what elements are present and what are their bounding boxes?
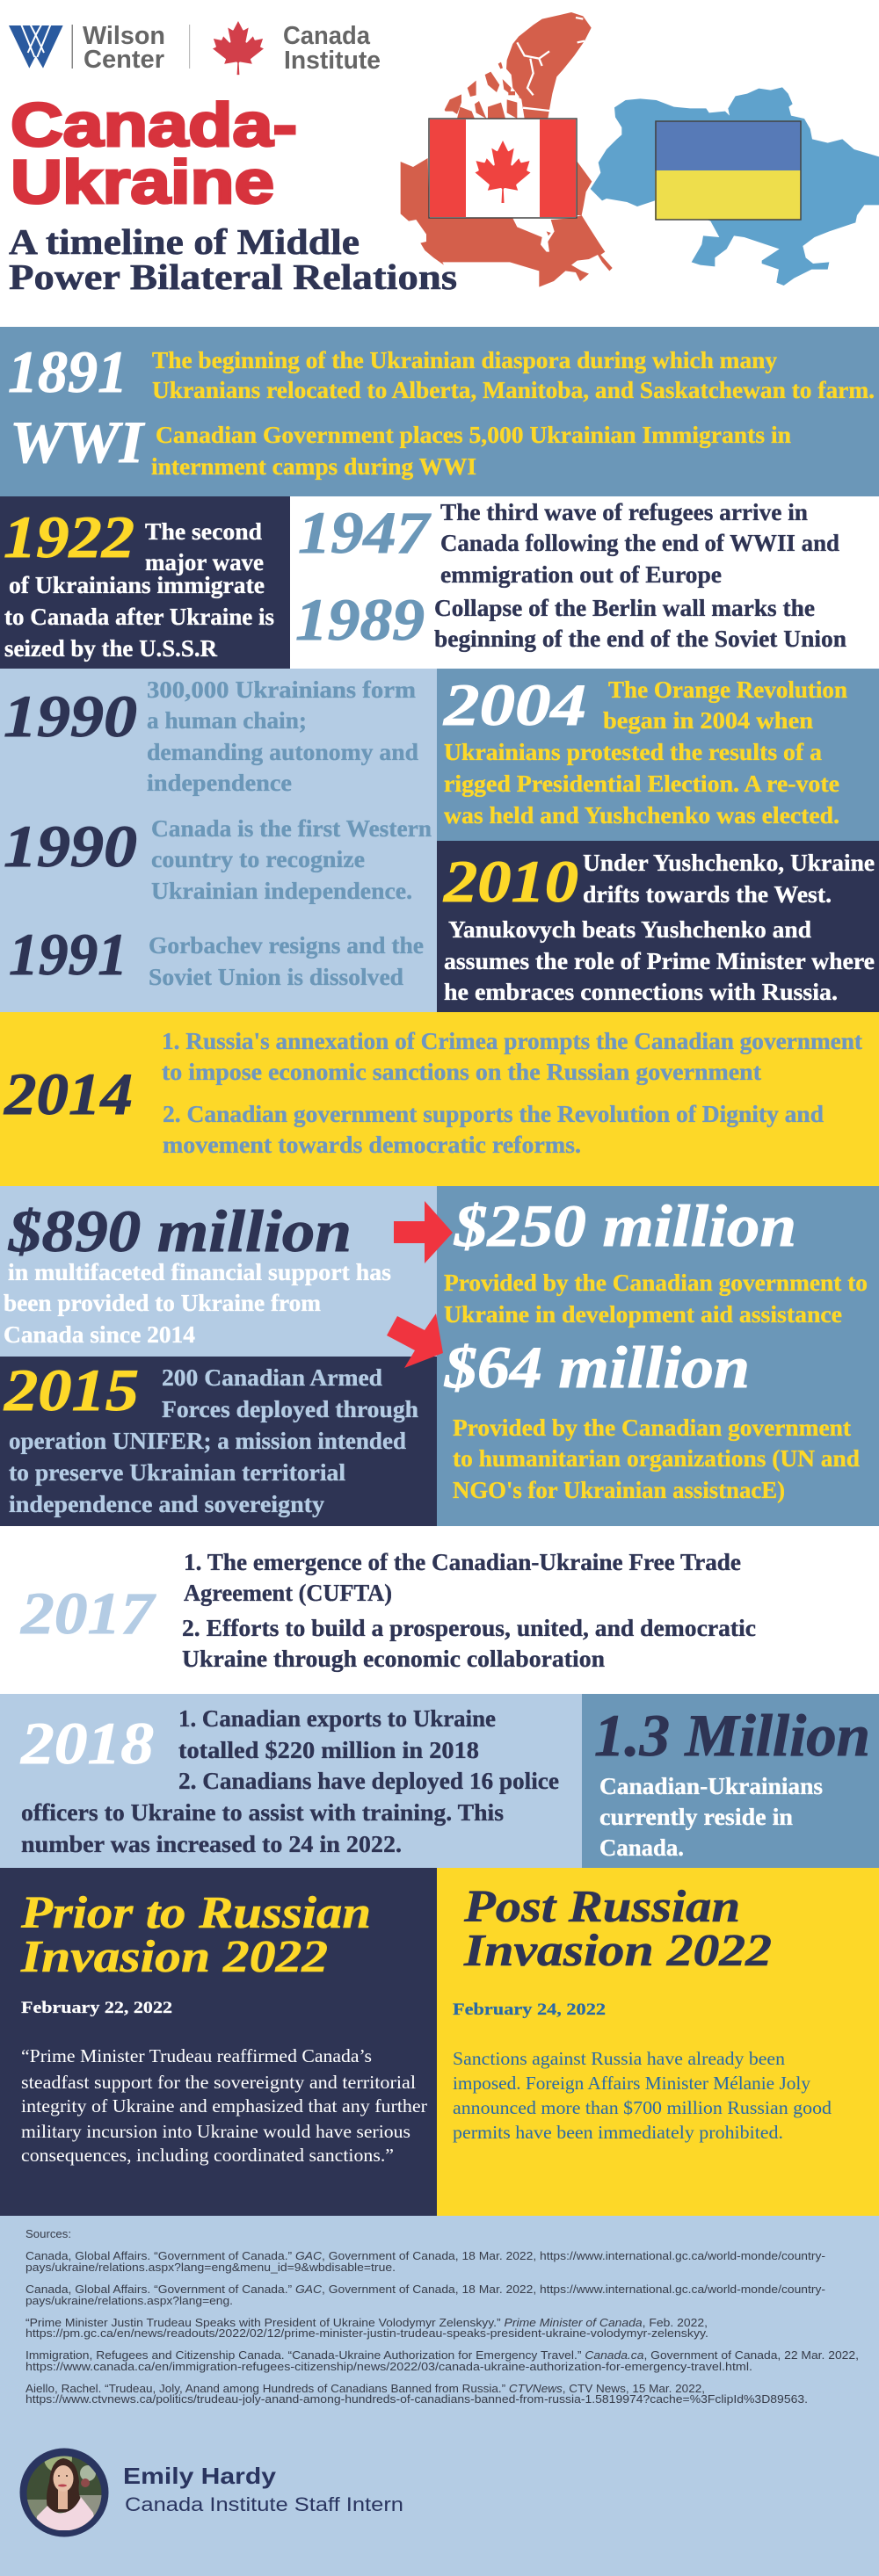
logo: Wilson Center <box>9 22 165 74</box>
sources: pays/ukraine/relations.aspx?lang=eng. <box>25 2294 233 2307</box>
text: Yushchenko and Yanukovych: he embraces connections with Russia. <box>444 979 838 1005</box>
heading: prior <box>20 1888 371 1982</box>
year: 2004: 2004 <box>443 671 586 738</box>
map: Canada <box>401 12 613 287</box>
text: development aid: Ukraine in development aid assistance <box>444 1301 842 1328</box>
quote: consequences, including coordinated sanctions.” <box>21 2145 394 2166</box>
text: financial support: been provided to Ukraine from <box>4 1290 322 1316</box>
text: Yushchenko and Yanukovych: drifts towards the West. <box>583 881 832 908</box>
text: financial support: Canada since 2014 <box>4 1321 195 1348</box>
text: exports and police: 1. Canadian exports to Ukraine <box>178 1705 496 1732</box>
year: 2017: 2017 <box>20 1580 156 1646</box>
text: internment: internment camps during WWI <box>151 453 476 480</box>
text: second wave <box>4 518 274 662</box>
text: Yushchenko and Yanukovych <box>444 850 875 1005</box>
text: Canadian-Ukrainians: Canadian-Ukrainians <box>599 1773 823 1799</box>
sources: https://www.ctvnews.ca/politics/trudeau-joly-anand-among-hundreds-of-canadians-banned-from-russia-1.5819974?cache=%3FclipId%3D89563. <box>25 2392 808 2406</box>
year: 1891: 1891 <box>8 338 127 405</box>
quote <box>21 2045 427 2166</box>
author name: Canada Institute Staff Intern <box>125 2493 403 2515</box>
header <box>9 12 879 297</box>
text: Berlin wall <box>434 595 846 652</box>
text: operation UNIFER <box>9 1364 418 1517</box>
text: development aid <box>444 1270 868 1328</box>
flag: Ukraine <box>655 121 801 220</box>
text: third wave: Canada following the end of WWII and <box>440 530 839 556</box>
stat: $64 million: $64 million <box>444 1334 750 1400</box>
panel: post invasion <box>437 1868 879 2216</box>
text: financial support <box>4 1259 391 1348</box>
year: 2010: 2010 <box>443 848 578 915</box>
panel: sources and author <box>0 2216 879 2576</box>
logo: Canada Institute: Institute <box>284 47 381 75</box>
text: Orange Revolution: Ukrainians protested the results of a <box>444 739 823 765</box>
sources: Canada, Global Affairs. “Government of Canada.” GAC, Government of Canada, 18 Mar. 2022, https://www.international.gc.ca/world-monde/country- <box>25 2283 825 2296</box>
text: humanitarian aid: to humanitarian organizations (UN and <box>453 1445 860 1472</box>
text: sanctions <box>453 2048 832 2143</box>
logo: Canada Institute: Canada <box>283 22 371 50</box>
panel: 2010 <box>437 841 879 1012</box>
sources: Immigration, Refugees and Citizenship Canada. “Canada-Ukraine Authorization for Emergency Travel.” Canada.ca , Government of Canada, 22 Mar. 2022, <box>25 2348 859 2362</box>
text: third wave: emmigration out of Europe <box>440 561 722 588</box>
text: Gorbachev: Gorbachev resigns and the <box>149 932 424 959</box>
text: humanitarian aid: NGO's for Ukrainian assistnacE) <box>453 1477 785 1503</box>
panel: 2014 <box>0 1012 879 1186</box>
subtitle: A timeline of Middle <box>9 221 360 262</box>
text: CUFTA: Agreement (CUFTA) <box>184 1580 392 1606</box>
text: operation UNIFER: to preserve Ukrainian territorial <box>9 1459 346 1486</box>
date: February 22: February 22, 2022 <box>21 1999 172 2017</box>
quote: integrity of Ukraine and emphasized that any further <box>21 2095 427 2117</box>
text: recognition: Canada is the first Western <box>151 815 432 842</box>
portrait: Emily Hardy <box>19 2444 109 2537</box>
heading: post <box>463 1882 772 1976</box>
panel: 2015 <box>0 1357 437 1526</box>
text: second wave: The second <box>145 518 262 545</box>
text: internment: Canadian Government places 5,000 Ukrainian Immigrants in <box>156 422 791 448</box>
logo: Wilson Center: Center <box>84 46 164 74</box>
year: 1947: 1947 <box>298 499 432 566</box>
text: Berlin wall: beginning of the end of the Soviet Union <box>434 626 846 652</box>
sources <box>25 2227 859 2406</box>
text: operation UNIFER: Forces deployed through <box>162 1396 418 1422</box>
sources: https://pm.gc.ca/en/news/readouts/2022/02/12/prime-minister-justin-trudeau-speaks-president-ukraine-volodymyr-zelenskyy. <box>25 2326 708 2340</box>
logo: Wilson Center: Wilson <box>83 22 165 50</box>
year: 2018: 2018 <box>20 1710 154 1776</box>
text: operation UNIFER: 200 Canadian Armed <box>162 1364 382 1391</box>
text: diaspora: Ukranians relocated to Alberta, Manitoba, and Saskatchewan to farm. <box>152 377 875 403</box>
date: February 24: February 24, 2022 <box>453 2001 606 2019</box>
text: Canadian-Ukrainians <box>599 1773 823 1861</box>
text: recognition: Ukrainian independence. <box>151 878 412 904</box>
text: Yushchenko and Yanukovych: assumes the role of Prime Minister where <box>444 948 875 974</box>
panel: prior to invasion <box>0 1868 437 2216</box>
panel: $890 million <box>0 1186 437 1357</box>
text: Orange Revolution: rigged Presidential Election. A re-vote <box>444 771 839 797</box>
sources: pays/ukraine/relations.aspx?lang=eng&menu_id=9&wbdisable=true. <box>25 2261 396 2274</box>
flag: Canada <box>429 119 577 218</box>
text: sanctions and reforms: 1. Russia's annexation of Crimea prompts the Canadian government <box>162 1028 862 1054</box>
text: exports and police: 2. Canadians have deployed 16 police <box>178 1768 559 1794</box>
year: 1922: 1922 <box>4 503 134 570</box>
text: recognition <box>151 815 432 904</box>
text: sanctions and reforms: movement towards democratic reforms. <box>163 1132 581 1158</box>
text: exports and police: totalled $220 million in 2018 <box>178 1737 479 1763</box>
subtitle: Power Bilateral Relations <box>9 257 457 297</box>
text: human chain: a human chain; <box>147 707 307 734</box>
text: Yushchenko and Yanukovych: Under Yushchenko, Ukraine <box>583 850 875 876</box>
sources: Canada, Global Affairs. “Government of Canada.” GAC, Government of Canada, 18 Mar. 2022, https://www.international.gc.ca/world-monde/country- <box>25 2249 825 2262</box>
text: Yushchenko and Yanukovych: Yanukovych beats Yushchenko and <box>448 916 811 943</box>
text: human chain <box>147 677 418 796</box>
year: 1989: 1989 <box>295 586 425 653</box>
text: development aid: Provided by the Canadian government to <box>444 1270 868 1296</box>
text: Orange Revolution: The Orange Revolution <box>608 677 847 703</box>
year: 1991: 1991 <box>9 921 127 988</box>
panel: 1891 and WWI <box>0 327 879 496</box>
text: diaspora <box>152 347 875 403</box>
text: second wave: of Ukrainians immigrate <box>9 572 265 598</box>
text: CUFTA <box>182 1549 756 1672</box>
panel: 1922 <box>0 496 290 669</box>
quote: military incursion into Ukraine would have serious <box>21 2121 410 2142</box>
text: second wave: to Canada after Ukraine is <box>4 604 274 630</box>
text: sanctions and reforms: 2. Canadian government supports the Revolution of Dignity and <box>163 1101 824 1127</box>
year: 2014: 2014 <box>4 1060 133 1127</box>
panel: 1.3 million <box>582 1694 879 1868</box>
text: sanctions: Sanctions against Russia have already been <box>453 2048 786 2069</box>
sources: https://www.canada.ca/en/immigration-refugees-citizenship/news/2022/03/canada-ukraine-authorization-for-emergency-travel.html. <box>25 2360 752 2373</box>
heading: post: Post Russian <box>463 1882 740 1932</box>
text: human chain: 300,000 Ukrainians form <box>147 677 417 703</box>
title <box>11 90 297 216</box>
heading: prior: Prior to Russian <box>20 1888 371 1938</box>
text: human chain: independence <box>147 770 292 796</box>
text: third wave: The third wave of refugees arrive in <box>440 499 808 525</box>
sources: Sources: <box>25 2227 71 2240</box>
text: sanctions: announced more than $700 million Russian good <box>453 2097 832 2118</box>
text: recognition: country to recognize <box>151 846 365 872</box>
text: exports and police: officers to Ukraine to assist with training. This <box>21 1799 504 1826</box>
text: Orange Revolution <box>444 677 847 829</box>
map: Ukraine <box>591 87 879 286</box>
text: sanctions: imposed. Foreign Affairs Minister Mélanie Joly <box>453 2073 810 2094</box>
text: third wave <box>440 499 839 588</box>
quote: steadfast support for the sovereignty and territorial <box>21 2072 416 2093</box>
text: diaspora: The beginning of the Ukrainian diaspora during which many <box>152 347 777 373</box>
panel: 1990 and 1991 <box>0 669 437 1012</box>
text: human chain: demanding autonomy and <box>147 739 418 765</box>
text: CUFTA: 2. Efforts to build a prosperous, united, and democratic <box>182 1615 756 1641</box>
sources: “Prime Minister Justin Trudeau Speaks with President of Ukraine Volodymyr Zelenskyy.” Prime Minister of Canada , Feb. 2022, <box>25 2316 708 2329</box>
text: operation UNIFER: independence and sovereignty <box>9 1491 325 1517</box>
text: humanitarian aid <box>453 1415 860 1503</box>
text: Orange Revolution: was held and Yushchenko was elected. <box>444 802 839 829</box>
sources: Aiello, Rachel. “Trudeau, Joly, Anand among Hundreds of Canadians Banned from Russia.” CTVNews, CTV News, 15 Mar. 2022, <box>25 2382 705 2395</box>
heading: post: Invasion 2022 <box>463 1926 772 1976</box>
title: Ukraine <box>11 148 274 216</box>
year: 1990 second: 1990 <box>4 813 137 879</box>
panel: 2004 <box>437 669 879 841</box>
text: Gorbachev: Soviet Union is dissolved <box>149 964 403 990</box>
text: sanctions: permits have been immediately prohibited. <box>453 2122 783 2143</box>
text: internment <box>151 422 791 480</box>
text: operation UNIFER: operation UNIFER; a mission intended <box>9 1428 406 1454</box>
author name: Emily Hardy <box>123 2463 277 2489</box>
text: second wave: seized by the U.S.S.R <box>4 635 217 662</box>
stat: $250 million: $250 million <box>454 1192 796 1259</box>
logo: Canada Institute <box>189 21 381 75</box>
author name <box>123 2463 403 2515</box>
arrow: to $64 million <box>387 1313 443 1368</box>
stat: $890 million: $890 million <box>8 1198 352 1264</box>
text: Orange Revolution: began in 2004 when <box>603 707 813 734</box>
text: Berlin wall: Collapse of the Berlin wall marks the <box>434 595 815 621</box>
text: CUFTA: 1. The emergence of the Canadian-Ukraine Free Trade <box>184 1549 741 1575</box>
text: humanitarian aid: Provided by the Canadian government <box>453 1415 851 1441</box>
text: financial support: in multifaceted financial support has <box>8 1259 391 1285</box>
text: Gorbachev <box>149 932 424 990</box>
title: Canada- <box>11 90 297 159</box>
heading: prior: Invasion 2022 <box>20 1932 328 1982</box>
subtitle <box>9 221 457 297</box>
quote: “Prime Minister Trudeau reaffirmed Canada’s <box>21 2045 372 2066</box>
panel: 2018 <box>0 1694 582 1868</box>
year: 2015: 2015 <box>4 1357 139 1423</box>
text: CUFTA: Ukraine through economic collaboration <box>182 1646 605 1672</box>
panel: 1947 and 1989 <box>290 496 879 669</box>
panel: 2017 <box>0 1526 879 1694</box>
panel: development and humanitarian aid <box>437 1186 879 1526</box>
stat: 1.3 Million: 1.3 Million <box>594 1702 870 1769</box>
text: exports and police <box>21 1705 559 1857</box>
text: Canadian-Ukrainians: currently reside in <box>599 1804 793 1830</box>
arrow: to $250 million <box>394 1201 453 1263</box>
text: Canadian-Ukrainians: Canada. <box>599 1834 684 1861</box>
text: sanctions and reforms <box>162 1028 862 1158</box>
text: exports and police: number was increased to 24 in 2022. <box>21 1831 402 1857</box>
year: WWI: WWI <box>10 409 146 475</box>
text: second wave: major wave <box>145 549 264 575</box>
year: 1990: 1990 <box>4 683 137 749</box>
text: sanctions and reforms: to impose economic sanctions on the Russian government <box>162 1059 761 1085</box>
